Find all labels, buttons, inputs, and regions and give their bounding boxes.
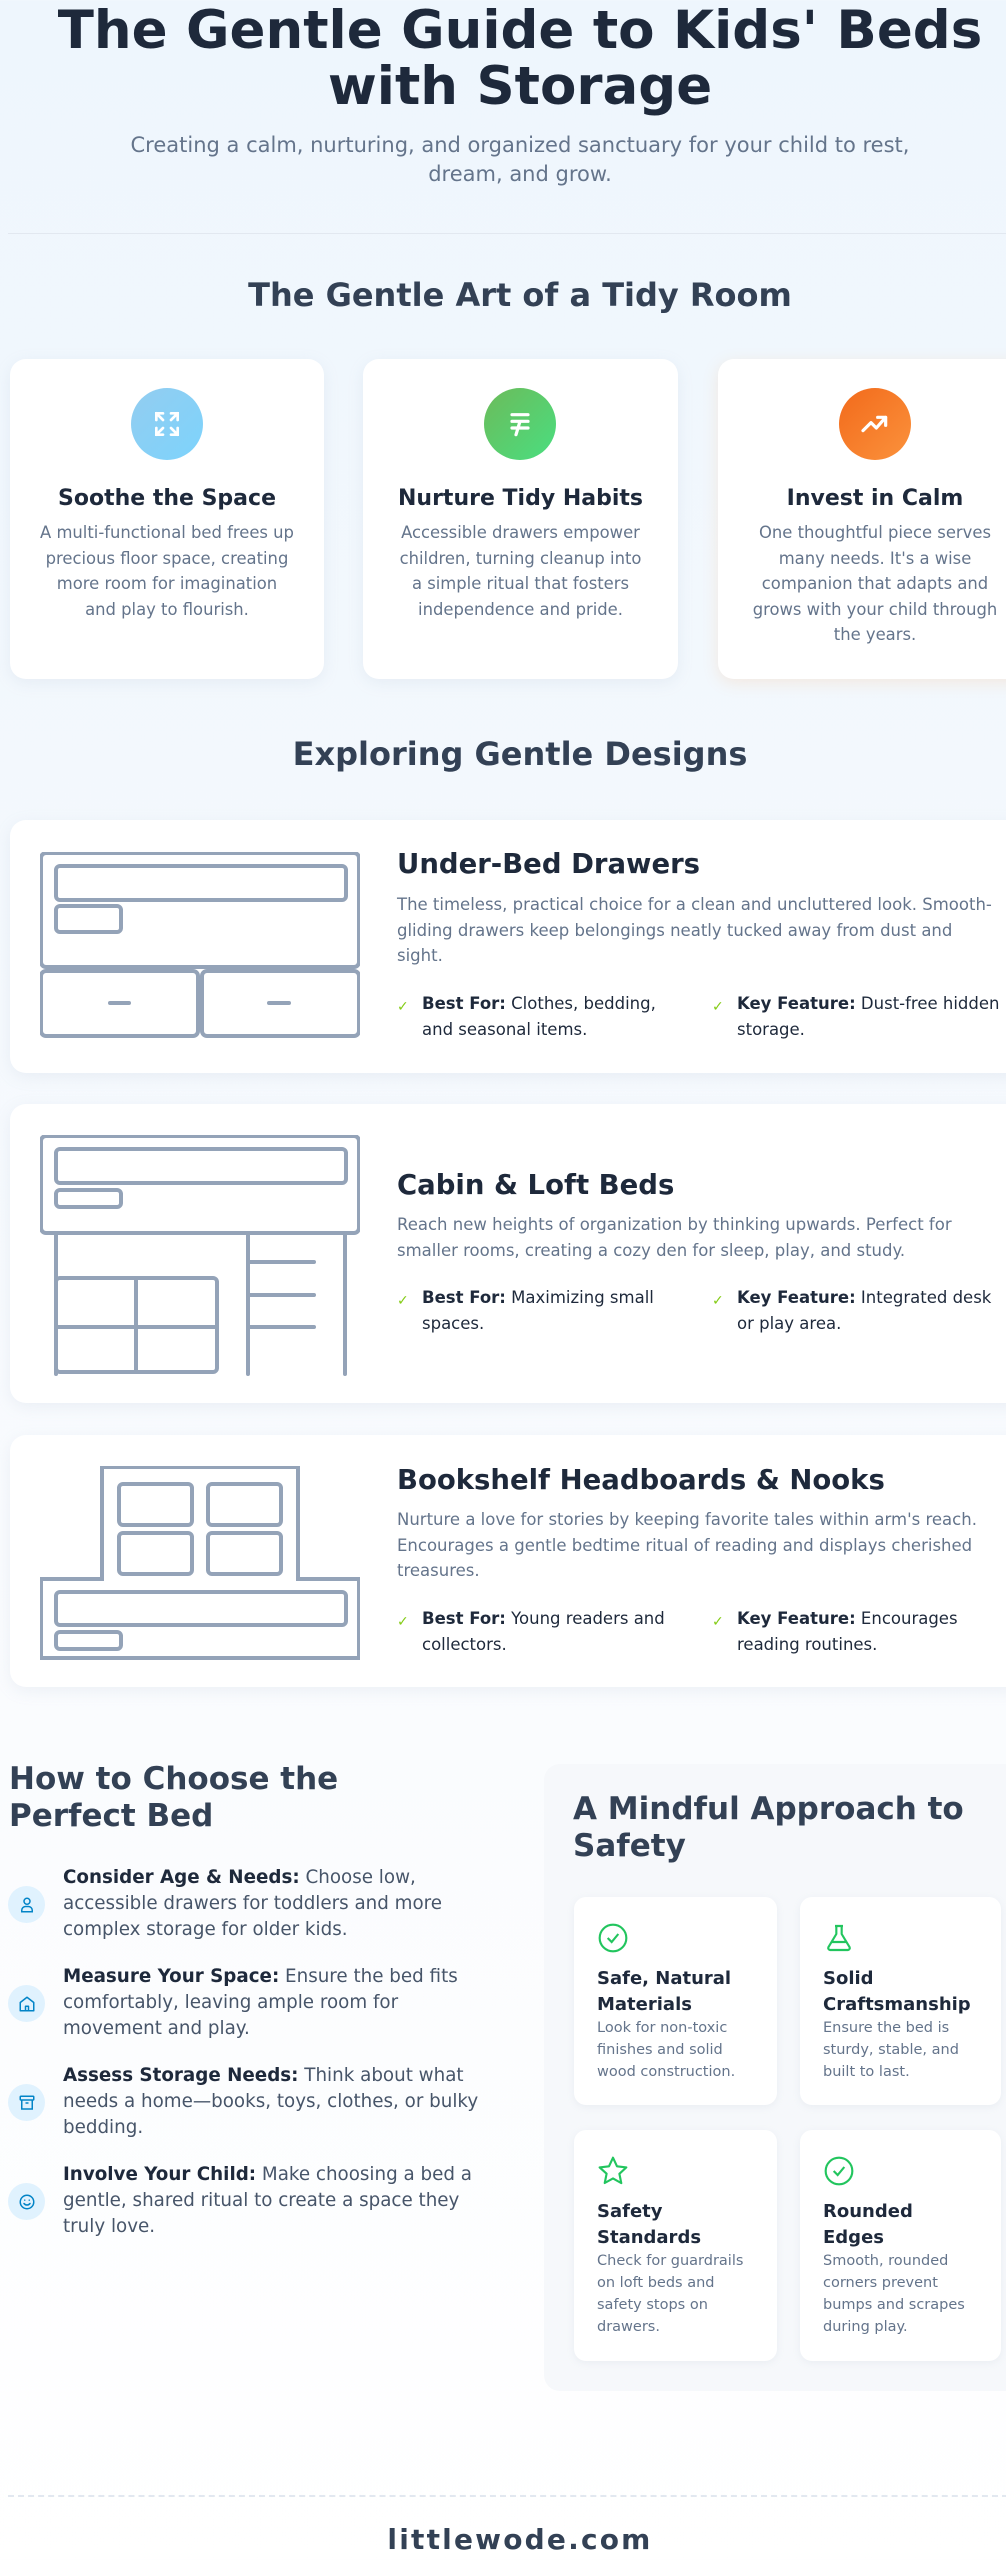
safety card: edges: Edges xyxy=(823,2227,884,2248)
list item: storage xyxy=(8,2065,478,2138)
list item: space xyxy=(8,1966,458,2039)
list item: space: comfortably, leaving ample room for xyxy=(63,1992,398,2013)
features: under-bed: Key Feature: Dust-free hidden xyxy=(737,994,1000,1013)
features: under-bed: and seasonal items. xyxy=(422,1020,587,1039)
text: bookshelf: treasures. xyxy=(397,1561,480,1580)
features: cabin: ✓ xyxy=(397,1293,409,1309)
safety card: craftsmanship: Craftsmanship xyxy=(823,1994,971,2015)
safety card: edges: bumps and scrapes xyxy=(823,2297,965,2313)
design card: cabin & loft xyxy=(10,1104,1006,1403)
card text xyxy=(753,523,997,644)
design card: under-bed drawers xyxy=(10,820,1006,1073)
features: under-bed xyxy=(397,994,1000,1039)
card text xyxy=(400,523,641,619)
card text: and play to flourish. xyxy=(85,600,249,619)
features: under-bed: ✓ xyxy=(397,999,409,1015)
card text: companion that adapts and xyxy=(762,574,988,593)
text: cabin xyxy=(397,1215,952,1260)
safety card: standards: Standards xyxy=(597,2227,701,2248)
list item: age: Consider Age & Needs: Choose low, xyxy=(63,1867,416,1888)
features: bookshelf: ✓ xyxy=(712,1614,724,1630)
card text: One thoughtful piece serves xyxy=(759,523,991,542)
list item: child: Involve Your Child: Make choosing a bed a xyxy=(63,2164,472,2185)
safety card: standards: Check for guardrails xyxy=(597,2253,743,2269)
text: under-bed: gliding drawers keep belongings neatly tucked away from dust and xyxy=(397,921,952,940)
features: bookshelf xyxy=(397,1609,958,1654)
heading: cabin: Cabin & Loft Beds xyxy=(397,1169,674,1201)
card heading: Nurture Tidy Habits xyxy=(398,486,643,511)
features: under-bed: storage. xyxy=(737,1020,805,1039)
card heading: Invest in Calm xyxy=(787,486,963,511)
list item: age: complex storage for older kids. xyxy=(63,1919,348,1940)
panel: safety xyxy=(544,1764,1006,2391)
features: bookshelf: Best For: Young readers and xyxy=(422,1609,665,1628)
title xyxy=(58,0,982,117)
heading: safety: Safety xyxy=(573,1828,686,1864)
safety card: craftsmanship: Solid xyxy=(823,1968,874,1989)
list item: space: movement and play. xyxy=(63,2018,250,2039)
icon: box xyxy=(8,2084,45,2121)
features: bookshelf: collectors. xyxy=(422,1635,507,1654)
list item: space: Measure Your Space: Ensure the bed fits xyxy=(63,1966,458,1987)
icon: expand xyxy=(131,388,203,460)
features: bookshelf: ✓ xyxy=(397,1614,409,1630)
list item: age xyxy=(8,1867,442,1940)
card text: Accessible drawers empower xyxy=(401,523,640,542)
safety card: materials: finishes and solid xyxy=(597,2042,723,2058)
card text xyxy=(40,523,294,619)
card text: a simple ritual that fosters xyxy=(412,574,629,593)
icon: tidy xyxy=(484,388,556,460)
card heading: Soothe the Space xyxy=(58,486,276,511)
list item: child xyxy=(8,2164,472,2237)
text: bookshelf: Nurture a love for stories by keeping favorite tales within arm's reach. xyxy=(397,1510,977,1529)
card: soothe the space xyxy=(10,359,324,679)
card: nurture tidy habits xyxy=(363,359,678,679)
features: bookshelf: Key Feature: Encourages xyxy=(737,1609,958,1628)
card: invest in calm xyxy=(718,359,1006,679)
subtitle: dream, and grow. xyxy=(428,162,612,186)
text: under-bed xyxy=(396,895,992,965)
card text: many needs. It's a wise xyxy=(779,549,971,568)
safety card: materials: wood construction. xyxy=(597,2064,735,2080)
card text: A multi-functional bed frees up xyxy=(40,523,294,542)
text: cabin: smaller rooms, creating a cozy den for sleep, play, and study. xyxy=(397,1241,905,1260)
icon: check circle xyxy=(598,1924,628,1952)
safety card: standards: on loft beds and xyxy=(597,2275,714,2291)
heading: under-bed: Under-Bed Drawers xyxy=(397,848,700,880)
card text: independence and pride. xyxy=(418,600,623,619)
icon: trend xyxy=(839,388,911,460)
heading: safety xyxy=(573,1791,964,1864)
features: cabin xyxy=(397,1288,992,1333)
safety card: standards xyxy=(574,2130,777,2361)
icon: person xyxy=(8,1886,45,1923)
features: cabin: spaces. xyxy=(422,1314,484,1333)
features: bookshelf: reading routines. xyxy=(737,1635,877,1654)
list item: storage: bedding. xyxy=(63,2117,143,2138)
list item: child: truly love. xyxy=(63,2216,155,2237)
heading: safety: A Mindful Approach to xyxy=(573,1791,964,1827)
features: cabin: Key Feature: Integrated desk xyxy=(737,1288,991,1307)
list item: storage: Assess Storage Needs: Think about what xyxy=(63,2065,464,2086)
heading: designs: Exploring Gentle Designs xyxy=(293,735,747,773)
design card: bookshelf xyxy=(10,1435,1006,1687)
features: under-bed: ✓ xyxy=(712,999,724,1015)
features: cabin: or play area. xyxy=(737,1314,841,1333)
heading: how to choose: How to Choose the xyxy=(9,1761,338,1797)
illustration: under-bed drawers xyxy=(40,852,360,1038)
text: bookshelf xyxy=(397,1510,977,1580)
card text: precious floor space, creating xyxy=(46,549,288,568)
title: with Storage xyxy=(328,56,712,117)
title: The Gentle Guide to Kids' Beds xyxy=(58,0,982,61)
icon: smile xyxy=(8,2183,45,2220)
heading: tidy room: The Gentle Art of a Tidy Room xyxy=(248,276,792,314)
safety card: materials xyxy=(574,1897,777,2105)
safety card: materials: Look for non-toxic xyxy=(597,2020,727,2036)
safety card: materials: Safe, Natural xyxy=(597,1968,731,1989)
text: under-bed: sight. xyxy=(397,946,443,965)
list item: storage: needs a home—books, toys, clothes, or bulky xyxy=(63,2091,478,2112)
icon: flask xyxy=(827,1924,851,1952)
card text: more room for imagination xyxy=(57,574,277,593)
icon: house xyxy=(8,1985,45,2022)
features: cabin: Best For: Maximizing small xyxy=(422,1288,654,1307)
safety card: craftsmanship: sturdy, stable, and xyxy=(823,2042,959,2058)
safety card: craftsmanship: built to last. xyxy=(823,2064,910,2080)
subtitle: Creating a calm, nurturing, and organized sanctuary for your child to rest, xyxy=(131,133,909,157)
heading: how to choose xyxy=(9,1761,338,1834)
subtitle xyxy=(131,133,909,186)
safety card: edges xyxy=(800,2130,1001,2361)
safety card: standards: safety stops on xyxy=(597,2297,708,2313)
list item: age: accessible drawers for toddlers and more xyxy=(63,1893,442,1914)
icon: check circle xyxy=(824,2156,854,2186)
icon: star xyxy=(598,2156,628,2184)
card text: children, turning cleanup into xyxy=(400,549,641,568)
heading: how to choose: Perfect Bed xyxy=(9,1798,213,1834)
safety card: craftsmanship xyxy=(800,1897,1001,2105)
safety card: craftsmanship: Ensure the bed is xyxy=(823,2020,949,2036)
safety card: standards: Safety xyxy=(597,2201,662,2222)
safety card: edges: during play. xyxy=(823,2319,908,2335)
list item: child: gentle, shared ritual to create a space they xyxy=(63,2190,459,2211)
card text: the years. xyxy=(834,625,916,644)
card text: grows with your child through xyxy=(753,600,997,619)
text: cabin: Reach new heights of organization by thinking upwards. Perfect for xyxy=(397,1215,952,1234)
safety card: standards: drawers. xyxy=(597,2319,660,2335)
features: under-bed: Best For: Clothes, bedding, xyxy=(422,994,656,1013)
text: bookshelf: Encourages a gentle bedtime ritual of reading and displays cherished xyxy=(397,1536,972,1555)
footer: site: littlewode.com xyxy=(387,2523,653,2556)
safety card: edges: Rounded xyxy=(823,2201,913,2222)
safety card: edges: corners prevent xyxy=(823,2275,938,2291)
safety card: edges: Smooth, rounded xyxy=(823,2253,948,2269)
illustration: loft bed xyxy=(40,1135,360,1376)
features: cabin: ✓ xyxy=(712,1293,724,1309)
text: under-bed: The timeless, practical choice for a clean and uncluttered look. Smooth- xyxy=(397,895,992,914)
heading: bookshelf: Bookshelf Headboards & Nooks xyxy=(397,1464,885,1496)
illustration: bookshelf headboard xyxy=(40,1466,360,1660)
safety card: materials: Materials xyxy=(597,1994,692,2015)
